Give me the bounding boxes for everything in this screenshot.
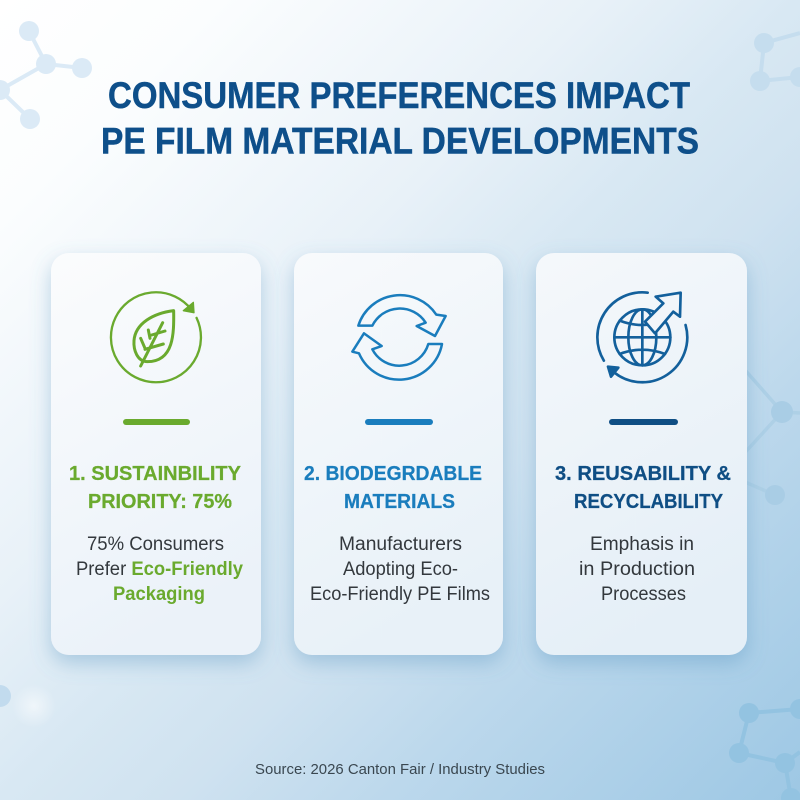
heading: reusability: RECYCLABILITY: [574, 491, 724, 513]
panel: sustainability priority: [51, 253, 261, 655]
text: manufacturers: [310, 534, 490, 605]
title: [101, 75, 699, 162]
text: production emphasis: [579, 534, 695, 605]
panel: reusability and recyclability: [536, 253, 747, 655]
text: eco-friendly preference: Prefer Eco-Friendly: [76, 559, 243, 580]
text: manufacturers: Adopting Eco-: [343, 559, 458, 580]
heading: sustainability: 1. SUSTAINBILITY: [69, 463, 242, 485]
text: eco-friendly preference: [76, 534, 243, 605]
text: eco-friendly preference: Packaging: [113, 584, 205, 605]
panel: biodegradable materials: [294, 253, 503, 655]
heading: reusability: 3. REUSABILITY &: [555, 463, 731, 485]
heading: reusability: [555, 463, 731, 513]
divider: blue: [365, 419, 433, 425]
source line: Source: 2026 Canton Fair / Industry Studies: [255, 761, 545, 778]
text: eco-friendly preference: 75% Consumers: [87, 534, 224, 555]
heading: biodegradable: 2. BIODEGRDABLE: [304, 463, 482, 485]
heading: biodegradable: MATERIALS: [344, 491, 455, 513]
text: manufacturers: Manufacturers: [339, 534, 462, 555]
heading: biodegradable: [304, 463, 482, 513]
icon: leaf in circular arrow: [111, 292, 201, 382]
text: production emphasis: in Production: [579, 559, 695, 580]
text: production emphasis: Emphasis in: [590, 534, 694, 555]
divider: green: [123, 419, 190, 425]
text: manufacturers: Eco-Friendly PE Films: [310, 584, 490, 605]
title: PE FILM MATERIAL DEVELOPMENTS: [101, 120, 699, 162]
icon: globe with arrows: [597, 292, 687, 382]
molecule: bottom right: [729, 699, 800, 800]
heading: sustainability: PRIORITY: 75%: [88, 491, 232, 513]
divider: navy: [609, 419, 678, 425]
title: CONSUMER PREFERENCES IMPACT: [108, 75, 690, 116]
text: production emphasis: Processes: [601, 584, 686, 605]
heading: sustainability: [69, 463, 242, 513]
molecule: right middle: [740, 370, 800, 505]
molecule: top right: [750, 33, 800, 91]
icon: recycling arrows: [352, 295, 446, 380]
molecule: top left: [0, 21, 92, 129]
molecule: bottom left node: [0, 684, 56, 728]
